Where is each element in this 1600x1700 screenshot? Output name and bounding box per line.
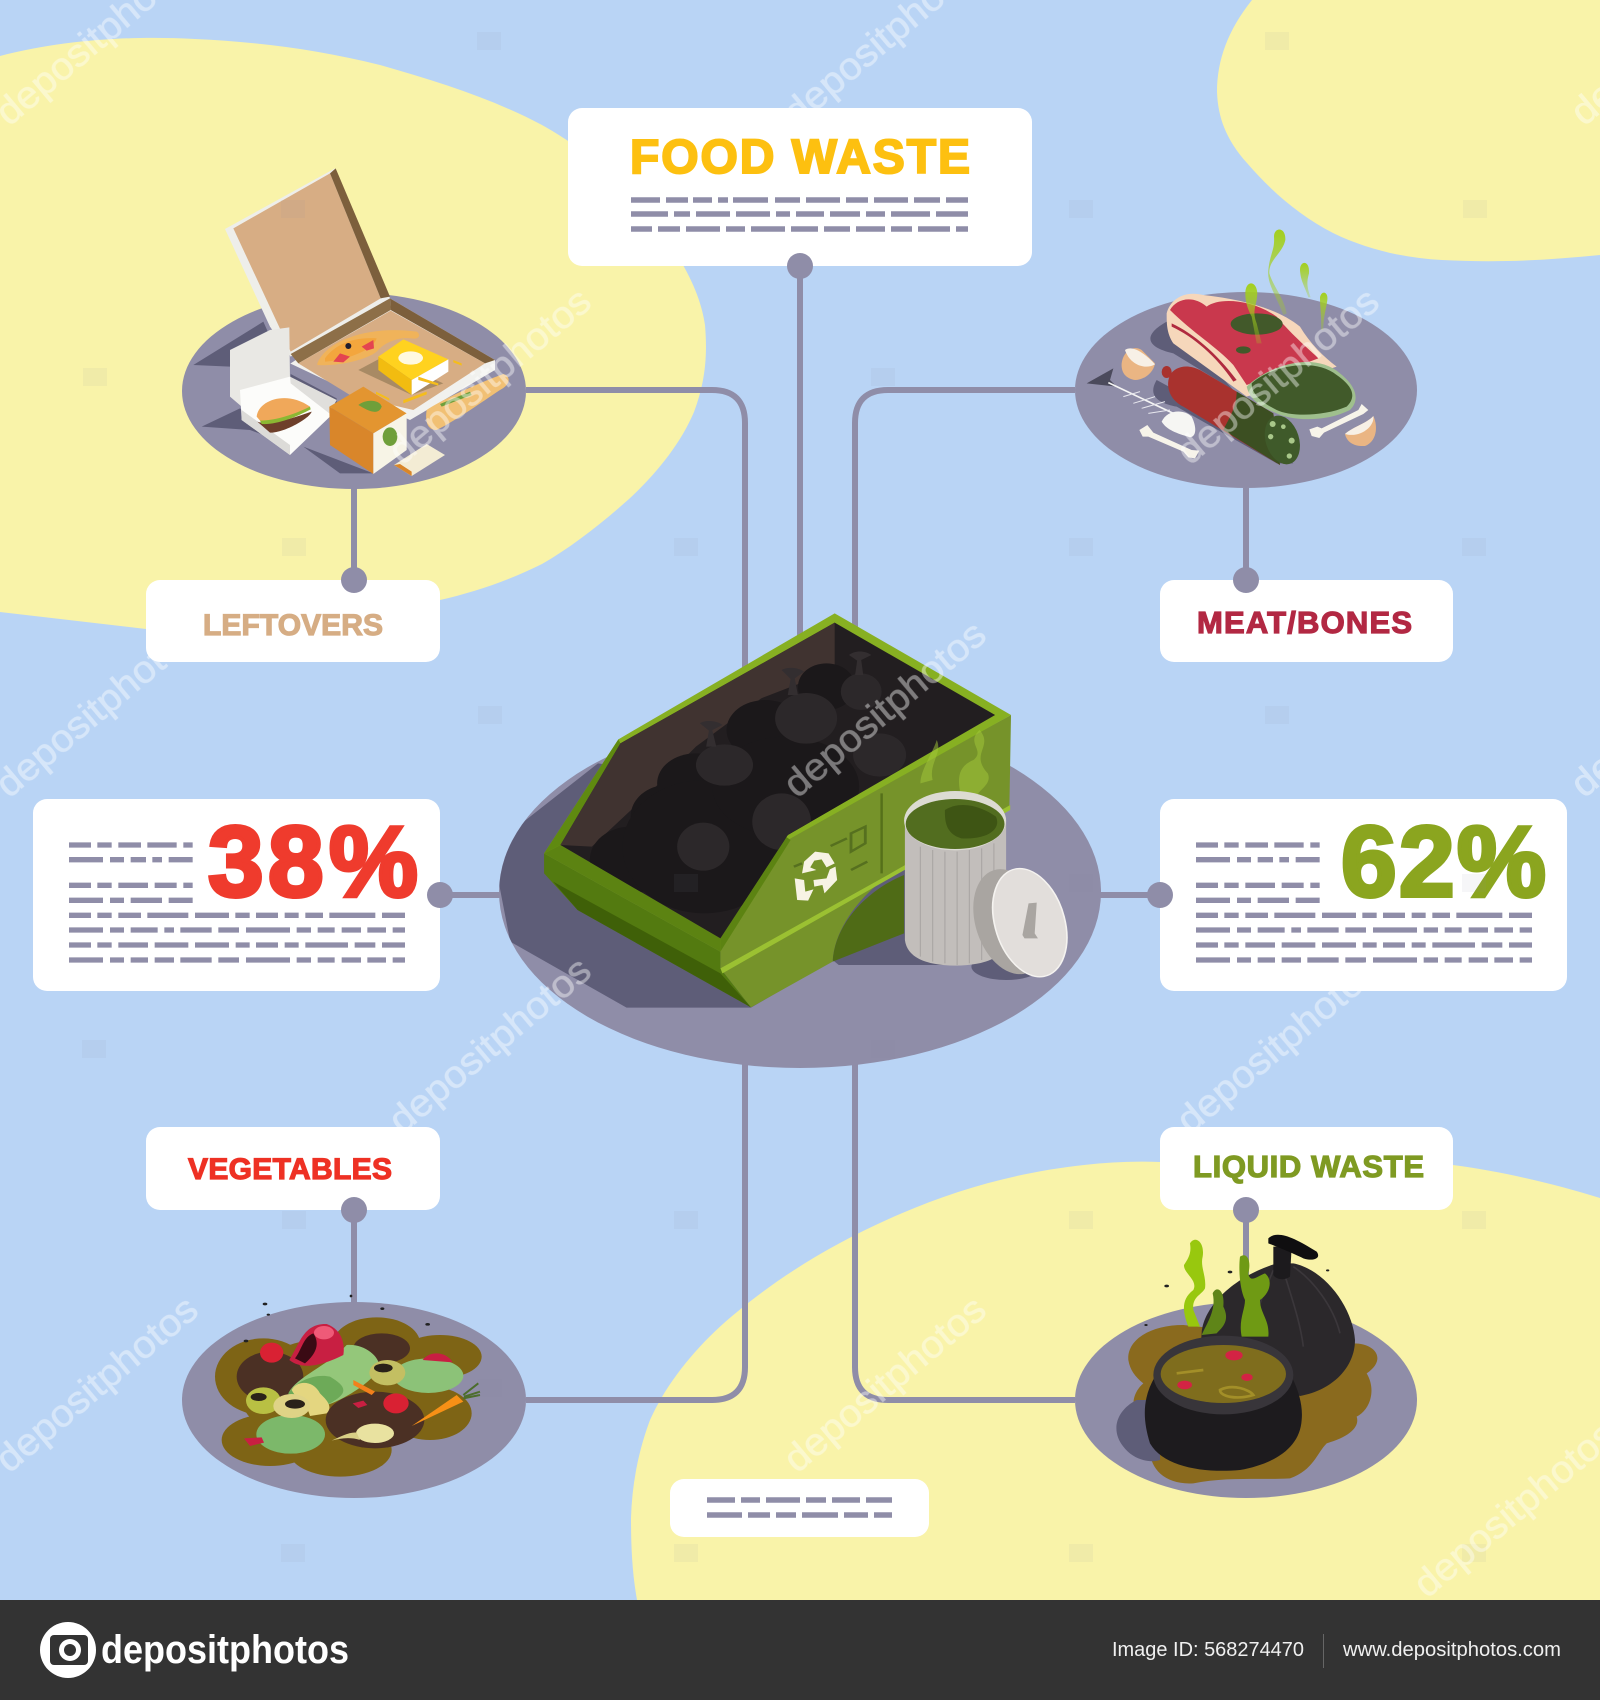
steak slab	[1167, 294, 1337, 397]
rotten potatoes	[246, 1360, 405, 1443]
platform ellipse: center	[499, 716, 1101, 1068]
panel: leftovers label	[146, 580, 440, 662]
shadows on platform	[193, 322, 373, 473]
panel: bottom placeholder caption	[670, 1479, 929, 1537]
dot: leftovers connector	[341, 567, 367, 593]
background blob: top left	[0, 38, 706, 640]
dot: vegetables connector	[341, 1197, 367, 1223]
percentage: 38%: 38%	[208, 806, 418, 918]
illustration: central dumpster	[492, 613, 1101, 1068]
flies	[244, 1295, 430, 1342]
background blob: top right	[1217, 0, 1600, 261]
dot: food waste connector	[787, 253, 813, 279]
shadows	[1150, 320, 1293, 463]
watermark: depositphotos text: depositphotos	[776, 1288, 994, 1481]
panel: vegetables label	[146, 1127, 440, 1210]
mouldy puddle	[1247, 362, 1356, 419]
garbage bags	[590, 651, 906, 913]
shadow on platform	[492, 763, 1041, 1008]
dumpster right face	[720, 715, 1011, 1007]
website: www.depositphotos.com	[1342, 1639, 1561, 1661]
watermark: depositphotos text: depositphotos	[381, 949, 599, 1142]
dark mud	[237, 1333, 424, 1448]
watermark: depositphotos text: depositphotos	[776, 613, 994, 806]
label: vegetables: VEGETABLES	[188, 1153, 392, 1186]
percentage: 62%: 62%	[1341, 806, 1546, 918]
watermark: depositphotos text: depositphotos	[1169, 949, 1387, 1142]
cauldron of sludge	[1145, 1336, 1302, 1471]
baguette	[426, 374, 509, 430]
dot: 38 percent connector	[427, 882, 453, 908]
illustration: liquid waste	[1075, 1235, 1417, 1498]
placeholder text lines	[1196, 845, 1532, 960]
fish skeleton	[1087, 368, 1195, 437]
butter box	[376, 339, 462, 403]
watermark: camera marks	[82, 32, 1487, 1562]
placeholder text lines	[707, 1500, 892, 1515]
platform ellipse: meat	[1075, 292, 1417, 488]
footer bar	[0, 1600, 1600, 1700]
panel: 62 percent	[1160, 799, 1567, 991]
panel: 38 percent	[33, 799, 440, 991]
heading: food waste: FOOD WASTE	[630, 131, 970, 184]
stench on dumpster	[920, 730, 989, 800]
black garbage bag	[1200, 1235, 1355, 1396]
dumpster interior	[560, 623, 995, 938]
platform ellipse: vegetables	[182, 1302, 526, 1498]
platform ellipse: liquid waste	[1075, 1302, 1417, 1498]
dot: meat connector	[1233, 567, 1259, 593]
placeholder text lines	[69, 845, 405, 960]
rotten tomato	[244, 1324, 453, 1446]
panel: meat and bones label	[1160, 580, 1453, 662]
burger container	[230, 327, 337, 455]
dumpster rim	[544, 613, 1011, 952]
dot: 62 percent connector	[1147, 882, 1173, 908]
pizza slice	[317, 330, 419, 365]
trash can lid	[962, 863, 1078, 982]
footer divider	[1323, 1634, 1324, 1668]
background blob: bottom right	[631, 1161, 1600, 1600]
pizza box lid	[225, 168, 390, 357]
sausage	[1162, 366, 1306, 469]
illustration: meat and bones	[1075, 230, 1417, 488]
placeholder text lines	[631, 200, 968, 229]
connector lines	[354, 266, 1246, 1400]
label: leftovers: LEFTOVERS	[203, 609, 383, 642]
cabbage leaves	[256, 1345, 463, 1454]
label: meat/bones: MEAT/BONES	[1197, 605, 1412, 640]
stench wisps	[1245, 230, 1327, 343]
shadow	[1116, 1400, 1160, 1461]
label: liquid waste: LIQUID WASTE	[1193, 1149, 1424, 1184]
illustration: rotten vegetables	[182, 1295, 526, 1498]
liquid puddle	[1128, 1325, 1377, 1483]
illustration: leftovers	[182, 168, 526, 489]
carrot	[353, 1380, 480, 1426]
eggshells	[1122, 348, 1376, 446]
muddy puddle	[215, 1317, 482, 1477]
brand name: depositphotos	[101, 1628, 349, 1672]
dumpster left face	[544, 853, 751, 1007]
image id: Image ID: 568274470	[1112, 1639, 1304, 1661]
watermark: depositphotos text: depositphotos	[1169, 280, 1387, 473]
dumpster wheel arch	[833, 875, 904, 962]
trash can	[904, 791, 1006, 966]
watermark: depositphotos text: depositphotos	[381, 280, 599, 473]
panel: liquid waste label	[1160, 1127, 1453, 1210]
dot: liquid waste connector	[1233, 1197, 1259, 1223]
stench wisps	[1184, 1240, 1270, 1337]
flies	[1144, 1269, 1329, 1326]
icon: recycle symbol and labels	[794, 827, 867, 901]
mouldy bread loaf	[329, 387, 445, 476]
pizza box base	[290, 298, 495, 420]
bones	[1139, 404, 1368, 458]
icon: depositphotos logo	[40, 1622, 96, 1678]
panel: food waste title	[568, 108, 1032, 266]
platform ellipse: leftovers	[182, 293, 526, 489]
